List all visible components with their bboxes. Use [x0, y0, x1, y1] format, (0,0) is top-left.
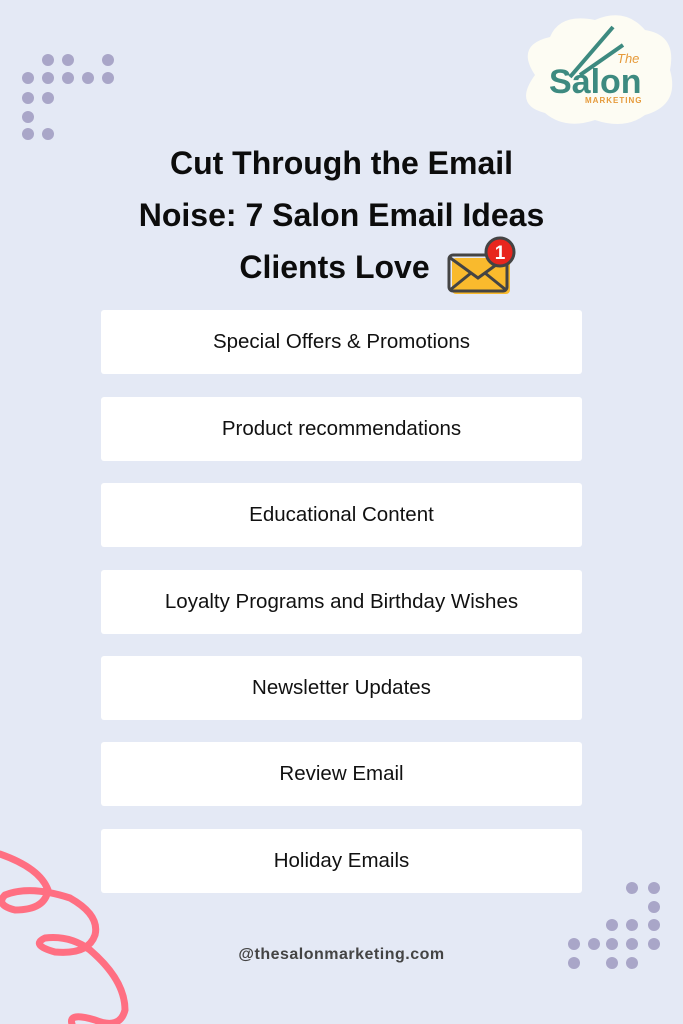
card: Newsletter Updates: [252, 676, 431, 699]
icon: envelope: 1: [495, 243, 506, 264]
logo: Salon: [549, 63, 642, 101]
title: Noise: 7 Salon Email Ideas: [139, 197, 544, 233]
logo: MARKETING: [585, 96, 642, 105]
card: Product recommendations: [222, 417, 461, 440]
card: [101, 656, 582, 720]
card: Educational Content: [249, 503, 434, 526]
title: Cut Through the Email: [170, 145, 513, 181]
dots bottom-right: [568, 882, 660, 969]
card: [101, 570, 582, 634]
card: [101, 742, 582, 806]
card: Review Email: [279, 762, 404, 785]
dots top-left: [22, 54, 114, 140]
card: Loyalty Programs and Birthday Wishes: [165, 590, 518, 613]
card: Holiday Emails: [274, 849, 409, 872]
squiggle: [0, 850, 128, 1024]
footer: @thesalonmarketing.com: [238, 946, 445, 963]
icon: envelope: [448, 236, 516, 294]
card: [101, 397, 582, 461]
card: [101, 829, 582, 893]
cards: Special Offers & Promotions: [213, 330, 470, 353]
title: Clients Love: [239, 249, 430, 285]
cards: [101, 310, 582, 374]
title: [139, 145, 544, 294]
card: [101, 483, 582, 547]
logo: [526, 15, 672, 124]
logo: The: [617, 51, 639, 66]
